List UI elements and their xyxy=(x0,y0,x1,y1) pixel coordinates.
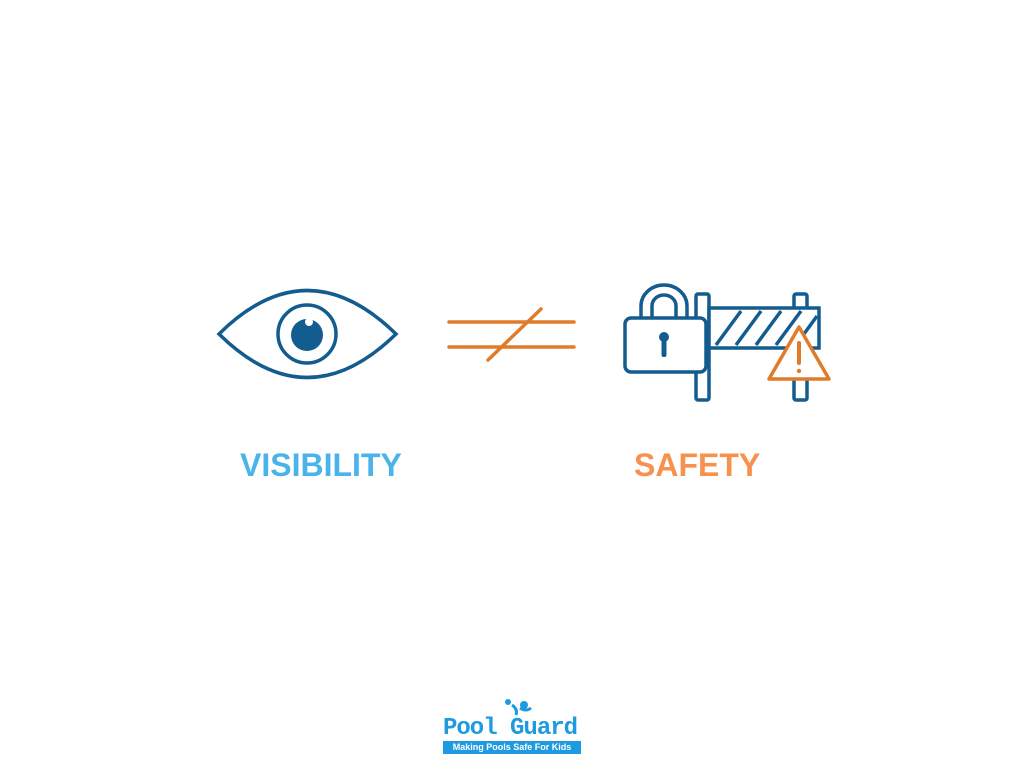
label: safety: SAFETY xyxy=(634,447,760,483)
logo tagline banner xyxy=(443,741,581,754)
icon: lock and barrier with warning xyxy=(625,285,829,400)
logo tagline banner: Making Pools Safe For Kids xyxy=(453,742,571,752)
label: visibility: VISIBILITY xyxy=(240,447,402,483)
icon: splash xyxy=(505,699,532,716)
icon: eye xyxy=(219,290,396,378)
logo wordmark: Pool Guard xyxy=(443,715,577,742)
logo: Pool Guard xyxy=(443,699,581,754)
icon: not equal xyxy=(449,309,574,360)
